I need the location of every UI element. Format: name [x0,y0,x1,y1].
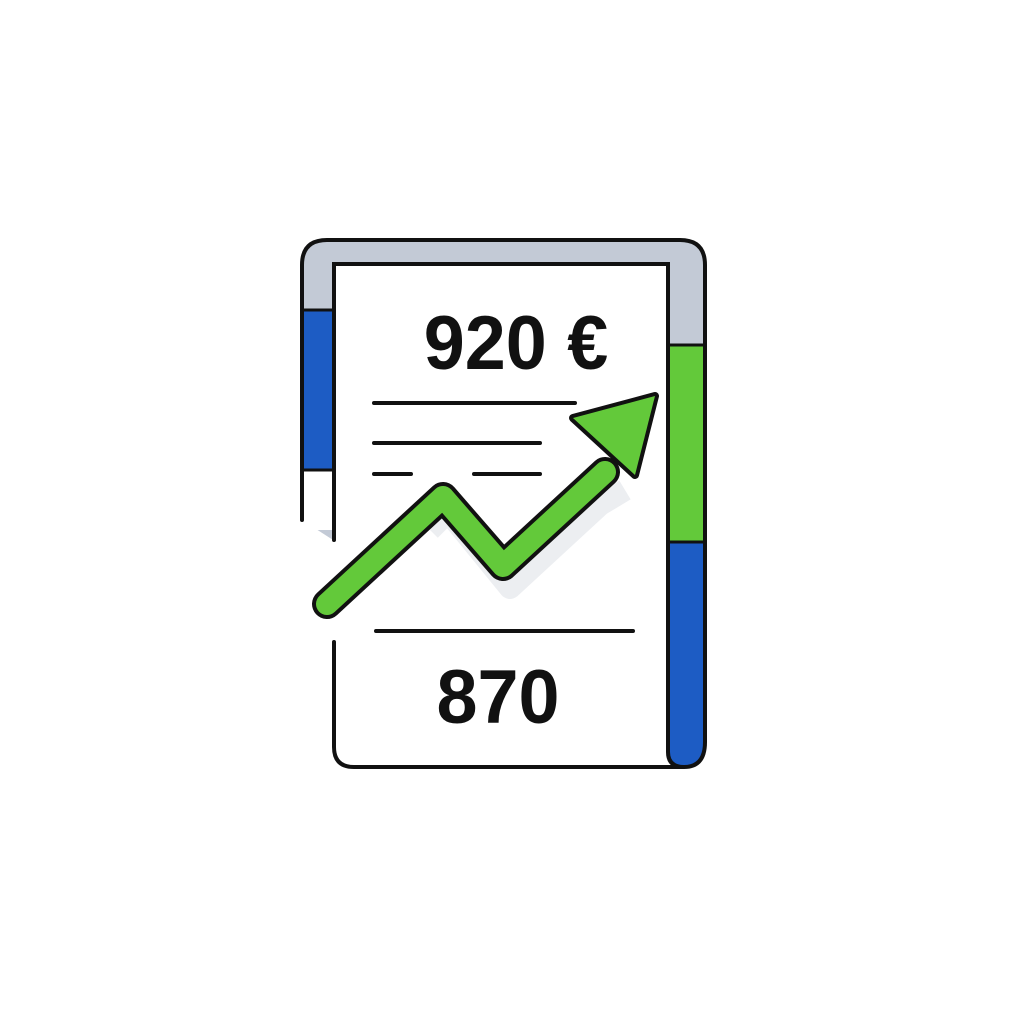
back frame [302,240,705,767]
bottom value: 870: 870 [437,654,559,739]
heading value: 920 €: 920 € [424,300,608,385]
page [334,264,684,767]
document icon [302,240,705,767]
text lines [374,403,633,631]
trend arrow [327,396,655,604]
